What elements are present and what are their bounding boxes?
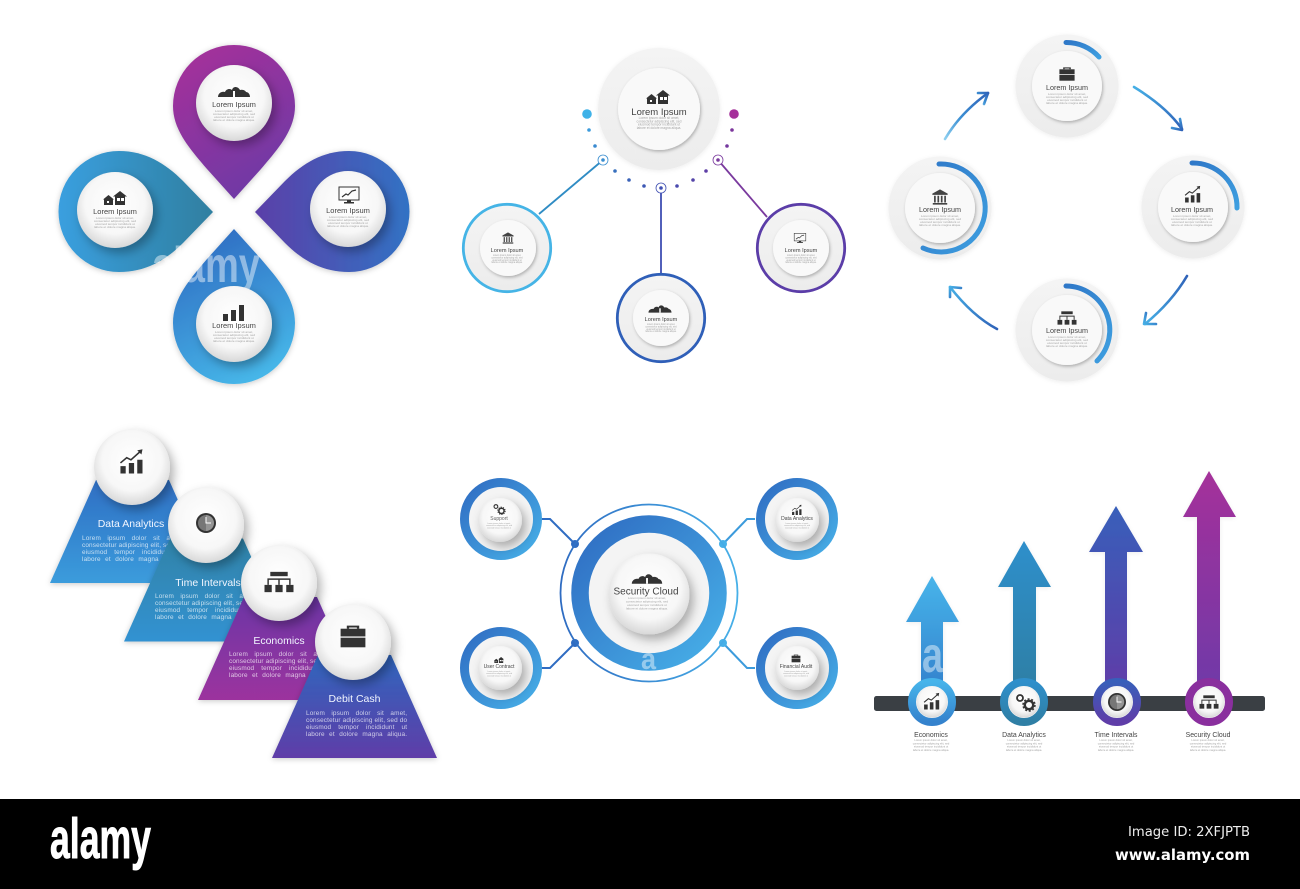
arrow: top to right xyxy=(1134,87,1182,130)
central ball xyxy=(608,554,690,634)
node: left: eiusmod tempor incididunt ut xyxy=(95,222,135,226)
node: top xyxy=(196,65,272,141)
step: Economics: consectetur adipiscing elit, sed do xyxy=(229,658,330,665)
label: Data Analytics xyxy=(1002,732,1046,752)
satellite: Data Analytics xyxy=(760,482,834,556)
connector: bottom left xyxy=(542,639,579,668)
node: right satellite: labore et dolore magna aliqua. xyxy=(785,261,817,264)
label: Data Analytics: Data Analytics xyxy=(1002,732,1046,739)
panel: rising arrows timeline xyxy=(874,471,1265,752)
label: Data Analytics: labore et dolore magna aliqua. xyxy=(1006,748,1042,752)
node: top progress xyxy=(1016,34,1118,138)
connector: top left xyxy=(542,519,579,548)
node: left satellite: consectetur adipiscing elit, sed xyxy=(491,256,523,259)
node: left satellite: Lorem Ipsum xyxy=(491,248,524,254)
node: right: Lorem ipsum dolor sit amet, xyxy=(329,215,367,219)
label: Security Cloud: labore et dolore magna aliqua. xyxy=(1190,748,1226,752)
panel: progress cycle xyxy=(888,34,1244,382)
node: top: eiusmod tempor incididunt ut xyxy=(214,115,254,119)
node: left progress: eiusmod tempor incididunt ut xyxy=(920,220,960,224)
label: Security Cloud xyxy=(1186,732,1231,752)
thin outer ring xyxy=(560,504,738,682)
label: Data Analytics: eiusmod tempor incididunt ut xyxy=(1007,745,1041,749)
satellite: Support xyxy=(464,482,538,556)
node: middle satellite xyxy=(617,274,705,362)
node: left progress: labore et dolore magna aliqua. xyxy=(919,223,961,227)
node: top progress: eiusmod tempor incididunt ut xyxy=(1047,98,1087,102)
satellite: Support: Support xyxy=(490,516,508,522)
node: right xyxy=(310,171,386,247)
step: Time Intervals: labore et dolore magna aliqua. xyxy=(155,614,256,621)
label: Data Analytics: Lorem ipsum dolor sit amet, xyxy=(1007,738,1041,742)
central ball: consectetur adipiscing elit, sed xyxy=(626,600,668,604)
node: right: Lorem Ipsum xyxy=(326,206,370,215)
footer bar xyxy=(0,799,1300,889)
arrow: left to top xyxy=(945,93,988,139)
footer logo: alamy xyxy=(50,807,151,871)
node: bottom progress xyxy=(1016,278,1118,382)
node: left satellite: labore et dolore magna aliqua. xyxy=(491,261,523,264)
step: Data Analytics: consectetur adipiscing elit, sed do xyxy=(82,542,183,549)
node: right: eiusmod tempor incididunt ut xyxy=(328,221,368,225)
node: bottom: eiusmod tempor incididunt ut xyxy=(214,336,254,340)
step: Economics: Economics xyxy=(253,635,305,647)
watermark: alamy xyxy=(152,237,260,293)
connector lines xyxy=(539,160,767,273)
arrow: Time Intervals xyxy=(1089,506,1143,690)
satellite: Data Analytics: consectetur adipiscing elit, sed xyxy=(784,524,810,527)
label: Economics: labore et dolore magna aliqua. xyxy=(913,748,949,752)
panel: security cloud hub xyxy=(464,482,834,704)
node: left satellite xyxy=(463,204,551,292)
label: Time Intervals: eiusmod tempor incididunt ut xyxy=(1099,745,1133,749)
central ball: eiusmod tempor incididunt ut xyxy=(627,603,667,607)
pin: right indigo xyxy=(255,151,409,272)
marker: Time Intervals xyxy=(1097,682,1137,722)
satellite: Financial Audit: Financial Audit xyxy=(780,664,813,670)
step: Economics: eiusmod tempor incididunt ut xyxy=(229,665,330,672)
satellite: Data Analytics: Data Analytics xyxy=(781,516,813,522)
satellite: Financial Audit xyxy=(760,632,834,704)
node: right progress: consectetur adipiscing elit, sed xyxy=(1171,217,1213,221)
node: bottom progress: labore et dolore magna aliqua. xyxy=(1046,344,1088,348)
pin: bottom blue xyxy=(173,229,295,384)
node: bottom progress: Lorem ipsum dolor sit amet, xyxy=(1048,335,1086,339)
pin: left teal blue xyxy=(58,151,213,272)
node: central xyxy=(598,48,720,170)
node: bottom progress: consectetur adipiscing elit, sed xyxy=(1046,338,1088,342)
node: bottom: labore et dolore magna aliqua. xyxy=(213,339,255,343)
node: central: Lorem Ipsum xyxy=(631,107,687,118)
node: top progress: labore et dolore magna aliqua. xyxy=(1046,101,1088,105)
label: Time Intervals xyxy=(1094,732,1138,752)
node: left satellite: Lorem ipsum dolor sit amet, xyxy=(493,254,522,257)
label: Economics: Economics xyxy=(914,732,948,739)
node: right satellite: eiusmod tempor incididunt ut xyxy=(786,259,816,262)
label: Time Intervals: Lorem ipsum dolor sit amet, xyxy=(1099,738,1133,742)
marker: Security Cloud xyxy=(1189,682,1229,722)
central ball: Lorem ipsum dolor sit amet, xyxy=(628,596,666,600)
satellite: Financial Audit: consectetur adipiscing elit, sed xyxy=(783,672,809,675)
timeline bar xyxy=(874,696,1265,711)
panel: hub with three satellites xyxy=(463,48,845,362)
central ball: Security Cloud xyxy=(613,586,679,598)
step: Data Analytics xyxy=(50,429,215,583)
node: left: Lorem Ipsum xyxy=(93,207,137,216)
satellite: Support: Lorem ipsum dolor sit amet, xyxy=(487,522,511,525)
thick ring xyxy=(580,524,718,662)
step: Economics xyxy=(198,545,363,700)
node: left xyxy=(77,172,153,248)
satellite: User Contract: consectetur adipiscing elit, sed xyxy=(486,672,512,675)
satellite: Financial Audit: Lorem ipsum dolor sit amet, xyxy=(784,670,808,673)
node: bottom: consectetur adipiscing elit, sed xyxy=(213,333,255,337)
step: Time Intervals: Lorem ipsum dolor sit amet, xyxy=(155,593,256,600)
node: right satellite: Lorem Ipsum xyxy=(785,248,818,254)
node: left progress xyxy=(888,156,992,260)
node: left: consectetur adipiscing elit, sed xyxy=(94,219,136,223)
pin: top purple xyxy=(173,45,295,199)
image id: Image ID: 2XFJPTB xyxy=(1128,824,1250,840)
node: right satellite: Lorem ipsum dolor sit amet, xyxy=(787,254,816,257)
node: left progress: Lorem ipsum dolor sit amet, xyxy=(921,214,959,218)
label: Time Intervals: Time Intervals xyxy=(1094,732,1138,739)
central ball: labore et dolore magna aliqua. xyxy=(626,606,668,610)
node: middle satellite: Lorem ipsum dolor sit amet, xyxy=(647,323,676,326)
node: right: labore et dolore magna aliqua. xyxy=(327,224,369,228)
node: bottom xyxy=(196,286,272,362)
node: right progress: eiusmod tempor incididunt ut xyxy=(1172,220,1212,224)
node: bottom progress: eiusmod tempor incididunt ut xyxy=(1047,341,1087,345)
marker: Economics xyxy=(912,682,952,722)
arrow: right to bottom xyxy=(1144,276,1187,324)
satellite: Financial Audit: eiusmod tempor incididunt ut xyxy=(784,674,809,677)
step: Debit Cash: eiusmod tempor incididunt ut xyxy=(306,724,407,731)
satellite: Support: consectetur adipiscing elit, sed xyxy=(486,524,512,527)
node: middle satellite: Lorem Ipsum xyxy=(645,317,678,323)
label: Security Cloud: Lorem ipsum dolor sit amet, xyxy=(1191,738,1225,742)
node: top: Lorem ipsum dolor sit amet, xyxy=(215,109,253,113)
step: Debit Cash xyxy=(272,604,437,758)
step: Time Intervals xyxy=(124,487,289,642)
label: Security Cloud: consectetur adipiscing elit, sed xyxy=(1190,741,1227,745)
step: Debit Cash: labore et dolore magna aliqua. xyxy=(306,731,407,738)
node: right satellite: consectetur adipiscing elit, sed xyxy=(785,256,817,259)
satellite: Data Analytics: Lorem ipsum dolor sit amet, xyxy=(785,522,809,525)
label: Security Cloud: eiusmod tempor incididunt ut xyxy=(1191,745,1225,749)
connector: top right xyxy=(719,519,755,548)
dotted arc xyxy=(582,109,739,193)
node: central: Lorem ipsum dolor sit amet, xyxy=(639,116,679,120)
node: top: labore et dolore magna aliqua. xyxy=(213,118,255,122)
step: Debit Cash: consectetur adipiscing elit, sed do xyxy=(306,717,407,724)
step: Data Analytics: Data Analytics xyxy=(98,518,164,530)
connector: bottom right xyxy=(719,639,755,668)
node: top progress: consectetur adipiscing elit, sed xyxy=(1046,95,1088,99)
arrow: Economics xyxy=(906,576,959,690)
label: Economics: consectetur adipiscing elit, sed xyxy=(913,741,950,745)
step: Time Intervals: eiusmod tempor incididunt ut xyxy=(155,607,256,614)
node: central: consectetur adipiscing elit, sed xyxy=(637,119,682,123)
node: right progress xyxy=(1142,156,1244,258)
node: right: consectetur adipiscing elit, sed xyxy=(327,218,369,222)
label: Economics: Lorem ipsum dolor sit amet, xyxy=(914,738,948,742)
panel: stacked triangle steps xyxy=(50,429,437,758)
node: left: Lorem ipsum dolor sit amet, xyxy=(96,216,134,220)
node: top progress: Lorem Ipsum xyxy=(1046,83,1088,92)
label: Security Cloud: Security Cloud xyxy=(1186,732,1231,739)
node: top progress: Lorem ipsum dolor sit amet, xyxy=(1048,92,1086,96)
label: Time Intervals: labore et dolore magna aliqua. xyxy=(1098,748,1134,752)
node: bottom: Lorem ipsum dolor sit amet, xyxy=(215,330,253,334)
step: Debit Cash: Debit Cash xyxy=(329,693,381,705)
marker: Data Analytics xyxy=(1004,682,1044,722)
node: top: consectetur adipiscing elit, sed xyxy=(213,112,255,116)
node: left: labore et dolore magna aliqua. xyxy=(94,225,136,229)
step: Data Analytics: labore et dolore magna aliqua. xyxy=(82,556,183,563)
step: Time Intervals: consectetur adipiscing elit, sed do xyxy=(155,600,256,607)
website: www.alamy.com xyxy=(1115,846,1250,864)
arrow: Data Analytics xyxy=(998,541,1051,690)
satellite: Support: eiusmod tempor incididunt ut xyxy=(487,526,512,529)
node: left progress: Lorem Ipsum xyxy=(919,205,961,214)
step: Economics: labore et dolore magna aliqua. xyxy=(229,672,330,679)
node: middle satellite: eiusmod tempor incididunt ut xyxy=(646,328,676,331)
watermark: a xyxy=(922,627,944,683)
node: bottom: Lorem Ipsum xyxy=(212,321,256,330)
step: Data Analytics: eiusmod tempor incididunt ut xyxy=(82,549,183,556)
arrow: bottom to left xyxy=(950,287,997,329)
panel: four petal pins xyxy=(58,45,409,384)
label: Data Analytics: consectetur adipiscing elit, sed xyxy=(1006,741,1043,745)
node: left satellite: eiusmod tempor incididunt ut xyxy=(492,259,522,262)
step: Debit Cash: Lorem ipsum dolor sit amet, xyxy=(306,710,407,717)
watermark: a xyxy=(641,643,656,676)
label: Economics xyxy=(913,732,950,752)
arrow: Security Cloud xyxy=(1183,471,1236,690)
node: central: labore et dolore magna aliqua. xyxy=(637,126,681,130)
node: right progress: labore et dolore magna aliqua. xyxy=(1171,223,1213,227)
step: Data Analytics: Lorem ipsum dolor sit amet, xyxy=(82,535,183,542)
node: central: eiusmod tempor incididunt ut xyxy=(638,123,680,127)
node: middle satellite: consectetur adipiscing elit, sed xyxy=(645,325,677,328)
label: Economics: eiusmod tempor incididunt ut xyxy=(914,745,948,749)
step: Economics: Lorem ipsum dolor sit amet, xyxy=(229,651,330,658)
satellite: User Contract: eiusmod tempor incididunt ut xyxy=(487,674,512,677)
node: bottom progress: Lorem Ipsum xyxy=(1046,326,1088,335)
node: top: Lorem Ipsum xyxy=(212,100,256,109)
satellite: User Contract: Lorem ipsum dolor sit amet, xyxy=(487,670,511,673)
node: right progress: Lorem Ipsum xyxy=(1171,205,1213,214)
satellite: Data Analytics: eiusmod tempor incididunt ut xyxy=(785,526,810,529)
node: left progress: consectetur adipiscing elit, sed xyxy=(919,217,961,221)
label: Time Intervals: consectetur adipiscing elit, sed xyxy=(1098,741,1135,745)
satellite: User Contract xyxy=(464,632,538,704)
node: right satellite xyxy=(757,204,845,292)
step: Time Intervals: Time Intervals xyxy=(175,577,241,589)
satellite: User Contract: User Contract xyxy=(484,664,515,670)
node: middle satellite: labore et dolore magna aliqua. xyxy=(645,330,677,333)
node: right progress: Lorem ipsum dolor sit amet, xyxy=(1173,214,1211,218)
